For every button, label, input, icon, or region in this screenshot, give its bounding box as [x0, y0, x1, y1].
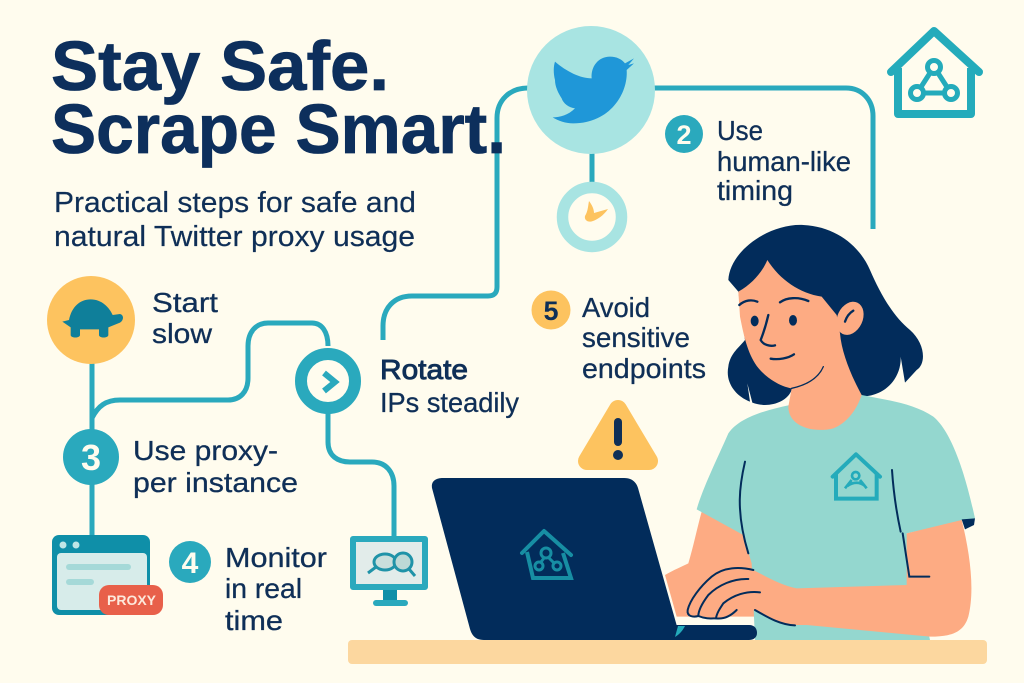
start slow: turtle icon and label: slow: [152, 318, 213, 349]
sleeve shadow: [962, 518, 975, 529]
title: Stay Safe.: [51, 27, 389, 105]
title: Scrape Smart.: [51, 90, 506, 168]
icon: proxy browser window: PROXY: [107, 592, 157, 608]
step 2 label: human-like: [717, 146, 851, 177]
step 3 label: 3: [81, 437, 101, 478]
person: [665, 225, 975, 640]
step 5 label: endpoints: [582, 353, 706, 384]
start slow: turtle icon and label: Start: [152, 287, 218, 318]
step 2 label: 2: [676, 120, 692, 150]
step 2 label: Use: [717, 115, 763, 146]
step 4 label: Monitor: [225, 542, 327, 573]
step 4 label: time: [225, 605, 283, 636]
start slow: turtle icon and label: [47, 276, 218, 364]
laptop logo: [522, 531, 571, 578]
step 3 label: per instance: [133, 467, 298, 498]
step 5 label: [532, 290, 706, 384]
step 4 label: in real: [225, 573, 302, 604]
subtitle: [54, 187, 416, 253]
facial features: [739, 298, 853, 388]
shirt logo: [833, 454, 880, 499]
face and neck: [738, 260, 862, 430]
ear: [831, 297, 869, 339]
icon: proxy browser window: [52, 535, 163, 615]
desk: [348, 640, 987, 664]
step 5 label: 5: [543, 296, 559, 326]
icon: rotate circle: [301, 354, 355, 408]
connector lines: [92, 88, 873, 540]
step 5 label: Avoid: [582, 292, 650, 323]
step 4 label: 4: [182, 547, 199, 580]
arm left: [665, 512, 755, 617]
icon: twitter bird: [527, 26, 655, 154]
arm right and hand: [687, 520, 971, 637]
t-shirt: [697, 395, 975, 640]
laptop: [432, 478, 757, 640]
icon: house network logo: [891, 31, 979, 114]
step 5 label: sensitive: [582, 322, 690, 353]
icon: warning triangle: [587, 409, 649, 461]
rotate label: IPs steadily: [380, 387, 519, 418]
icon: clock: [562, 188, 622, 246]
title: [51, 27, 506, 168]
step 3 label: [63, 429, 298, 498]
shirt and hand lines: [688, 462, 929, 625]
step 2 label: [665, 115, 851, 206]
icon: monitor with magnifier: [353, 539, 425, 606]
step 4 label: [169, 541, 327, 636]
step 3 label: Use proxy-: [133, 435, 278, 466]
step 2 label: timing: [717, 175, 793, 206]
hair: [728, 225, 923, 405]
subtitle: Practical steps for safe and: [54, 187, 416, 219]
rotate label: [380, 354, 519, 418]
subtitle: natural Twitter proxy usage: [54, 221, 415, 253]
rotate label: Rotate: [380, 354, 468, 385]
